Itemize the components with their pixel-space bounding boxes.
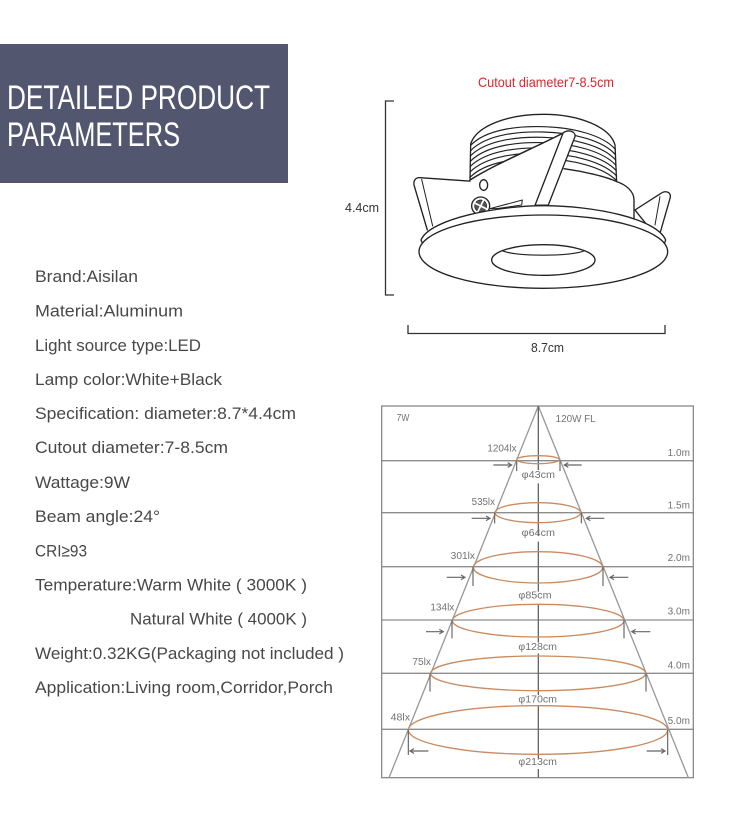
chart header labels: 120W FL xyxy=(556,414,596,425)
distance labels: 2.0m xyxy=(668,553,690,564)
beam width ticks and arrows xyxy=(408,461,668,755)
beam diameter labels xyxy=(518,470,557,768)
chart header labels xyxy=(397,413,596,425)
panel: product specification list: Lamp color:White+Black xyxy=(35,370,222,389)
title banner xyxy=(0,44,288,183)
panel: product specification list: Cutout diameter:7-8.5cm xyxy=(35,438,228,457)
distance labels: 1.0m xyxy=(668,448,690,459)
panel: product specification list: Temperature:Warm White ( 3000K ) xyxy=(35,576,307,594)
title xyxy=(7,79,270,154)
illuminance labels: 75lx xyxy=(412,657,432,668)
illuminance labels: 48lx xyxy=(391,712,411,723)
beam diameter labels: φ170cm xyxy=(518,694,557,705)
illuminance labels: 535lx xyxy=(472,497,496,508)
chart frame and distance lines xyxy=(382,406,693,778)
panel: product specification list: Wattage:9W xyxy=(35,473,130,492)
width dimension bracket xyxy=(408,325,665,355)
panel: product specification list: Material:Aluminum xyxy=(35,302,183,320)
illuminance labels xyxy=(391,444,517,723)
chart header labels: 7W xyxy=(397,413,410,424)
height dimension bracket xyxy=(345,101,394,295)
beam diameter labels: φ64cm xyxy=(522,528,555,539)
beam diameter labels: φ213cm xyxy=(518,757,557,768)
width dimension bracket: 8.7cm xyxy=(531,340,564,355)
distance labels: 3.0m xyxy=(668,607,690,618)
illuminance labels: 1204lx xyxy=(487,444,517,455)
cutout diameter label: Cutout diameter7-8.5cm xyxy=(478,74,614,90)
beam diameter labels: φ128cm xyxy=(518,642,557,653)
distance labels: 1.5m xyxy=(668,500,690,511)
light spot ellipses xyxy=(408,456,668,754)
beam diameter labels: φ85cm xyxy=(518,591,552,602)
panel: product specification list: Specification: diameter:8.7*4.4cm xyxy=(35,404,296,423)
distance labels: 4.0m xyxy=(668,660,690,671)
panel: product specification list: Application:Living room,Corridor,Porch xyxy=(35,678,333,697)
illuminance labels: 301lx xyxy=(451,551,476,562)
title: PARAMETERS xyxy=(7,116,180,154)
illuminance labels: 134lx xyxy=(430,603,455,614)
distance labels xyxy=(668,448,690,727)
distance labels: 5.0m xyxy=(668,716,690,727)
panel: product specification list: Light source type:LED xyxy=(35,336,201,355)
panel: product specification list: Weight:0.32KG(Packaging not included ) xyxy=(35,644,344,663)
chart: beam illuminance diagram xyxy=(382,406,693,778)
height dimension bracket: 4.4cm xyxy=(345,200,379,215)
panel: product specification list: Brand:Aisilan xyxy=(35,267,138,286)
panel: product specification list: Natural White ( 4000K ) xyxy=(130,610,307,628)
panel: product specification list xyxy=(35,267,344,697)
title: DETAILED PRODUCT xyxy=(7,79,270,117)
beam diameter labels: φ43cm xyxy=(522,470,555,481)
panel: product specification list: CRI≥93 xyxy=(35,542,87,560)
icon: downlight line drawing xyxy=(414,114,670,288)
panel: product specification list: Beam angle:24° xyxy=(35,507,160,526)
